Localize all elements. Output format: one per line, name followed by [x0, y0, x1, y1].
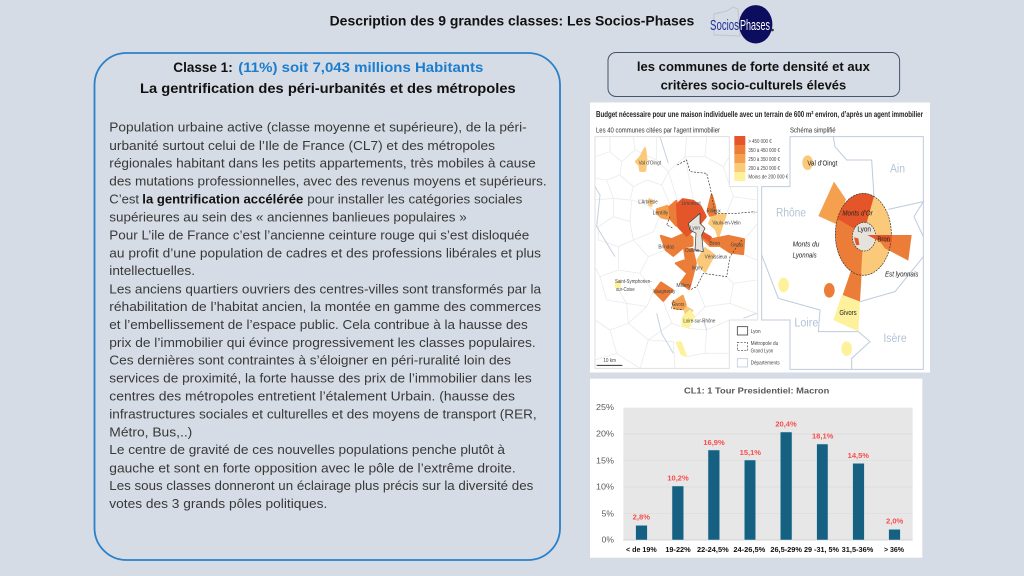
bar value labels: 2,0%: [886, 517, 904, 526]
y axis labels: 5%: [602, 508, 614, 518]
text block: body description: C’est: [109, 192, 139, 207]
bar value labels: 15,1%: [740, 448, 761, 457]
text block: body description: prix de l’immobilier qui évince progressivement les classes populaires.: [109, 335, 536, 350]
x axis labels: [626, 545, 904, 554]
commune labels: Loire-sur-Rhône: [683, 319, 715, 325]
schema labels: [776, 161, 919, 345]
x axis labels: < de 19%: [626, 545, 657, 554]
heading: la gentrification: La gentrification des péri-urbanités et des métropoles: [140, 80, 516, 96]
text block: body description: Population urbaine active (classe moyenne et supérieure), de la péri-: [109, 120, 527, 135]
x axis labels: 26,5-29%: [770, 545, 802, 554]
map: schéma simplifié: [762, 127, 923, 369]
commune labels: Irigny: [692, 265, 703, 271]
chart title: CL1: 1 Tour Presidentiel: Macron: [684, 386, 829, 396]
panel: budget map: [590, 102, 930, 372]
text block: body description: régionales habitant dans les petits appartements, très mobiles à cause: [109, 156, 536, 171]
scale bar: [597, 358, 622, 365]
text block: body description: infrastructures sociales et culturelles et des moyens de transport (RER,: [109, 406, 537, 421]
x axis labels: 22-24,5%: [697, 545, 729, 554]
commune labels: Vénissieux: [705, 255, 728, 261]
commune labels: Givors: [672, 302, 685, 308]
bar value labels: 2,8%: [633, 512, 650, 521]
text block: body description: services de proximité, la forte hausse des prix de l’immobilier dans les: [109, 370, 532, 385]
panel: communes heading: critères socio-culturels élevés: [661, 78, 846, 92]
bar value labels: [633, 420, 904, 526]
schema labels: Lyonnais: [793, 252, 817, 259]
legend: map symbols: Départements: [751, 360, 780, 366]
heading: classe 1: (11%) soit 7,043 millions Habitants: [238, 59, 484, 75]
legend: budget: 200 à 250 000 €: [748, 166, 780, 172]
commune labels: Vaulx-en-Velin: [712, 220, 741, 226]
text block: body description: au profit d’une population de cadres et des professions libérales et plus: [109, 245, 542, 260]
icon: Socios Phases logo: Socios: [710, 17, 739, 34]
legend: map symbols: [737, 327, 780, 367]
text block: body description: réhabilitation de l’habitat ancien, la montée en gamme des commerces: [109, 299, 542, 314]
commune labels: Saint-Symphorien-: [615, 279, 652, 285]
commune labels: Lyon: [690, 225, 700, 231]
commune labels: L’Arbresle: [638, 200, 658, 206]
legend: map symbols: Grand Lyon: [751, 348, 773, 354]
title: Description des 9 grandes classes: Les Socios-Phases: [330, 13, 695, 29]
bar value labels: 20,4%: [775, 420, 797, 429]
schema labels: Monts du: [793, 241, 819, 248]
map: 40 communes: Les 40 communes citées par l’agent immobilier: [596, 127, 721, 134]
text block: body description: centres des métropoles entretient l’étalement Urbain. (hausse des: [109, 388, 516, 403]
bars: [636, 432, 900, 540]
text block: body description: des mutations professionnelles, avec des revenus moyens et supérieurs.: [109, 174, 547, 189]
commune labels: Genas: [731, 243, 744, 249]
commune labels: Oullins: [685, 248, 700, 254]
x axis labels: 31,5-36%: [842, 545, 874, 554]
legend: budget: > 450 000 €: [748, 139, 772, 145]
panel: communes heading: les communes de forte densité et aux: [637, 59, 871, 74]
y axis labels: 25%: [596, 402, 614, 412]
bar chart: CL1 1 Tour Presidentiel Macron: [590, 379, 922, 558]
y axis labels: 0%: [602, 535, 614, 545]
schema labels: Isère: [883, 331, 907, 345]
region: communes colored by budget: [616, 148, 744, 356]
commune labels: Brindas: [658, 245, 675, 251]
bar value labels: 18,1%: [812, 432, 834, 441]
y axis labels: 20%: [596, 429, 614, 439]
x axis labels: > 36%: [884, 545, 904, 554]
icon: Socios Phases logo: Phases: [740, 17, 770, 34]
map: schéma simplifié: Schéma simplifié: [790, 127, 836, 134]
text block: body description: Le centre de gravité de ces nouvelles populations penche plutôt à: [109, 442, 506, 457]
y axis labels: [596, 402, 614, 545]
text block: body description: gauche et sont en forte opposition avec le pôle de l’extrême droite.: [109, 460, 516, 475]
schema labels: Val d’Oingt: [807, 161, 837, 168]
region: schema wedges: [778, 155, 912, 356]
text block: body description: [109, 120, 547, 511]
schema labels: Est lyonnais: [885, 271, 919, 278]
y axis labels: 10%: [596, 482, 614, 492]
text block: body description: et l’embellissement de l’espace public. Cela contribue à la hausse des: [109, 317, 528, 332]
text block: body description: Métro, Bus,..): [109, 424, 192, 439]
region: métropole boundary: [667, 160, 755, 310]
x axis labels: 24-26,5%: [733, 545, 766, 554]
legend: budget: 350 à 450 000 €: [748, 148, 780, 154]
legend: budget: Moins de 200 000 €: [748, 174, 788, 180]
text block: body description: Pour L’ile de France c’est l’ancienne ceinture rouge qui s’est disloquée: [109, 227, 529, 242]
schema labels: Rhône: [776, 205, 806, 219]
panel: communes heading: [608, 52, 900, 96]
text block: body description: supérieures au sein des « anciennes banlieues populaires »: [109, 210, 467, 225]
commune labels: Val d’Oingt: [639, 160, 661, 166]
schema labels: Loire: [794, 315, 819, 329]
icon: Socios Phases logo: [710, 5, 774, 44]
text block: body description: pour installer les catégories sociales: [307, 192, 523, 207]
legend: map symbols: Lyon: [751, 329, 761, 335]
heading: classe 1: Classe 1:: [173, 59, 233, 75]
commune labels: Limonest: [682, 201, 701, 207]
schema labels: Monts d’Or: [842, 211, 873, 218]
schema labels: Bron: [877, 236, 890, 243]
commune labels: Millery: [676, 283, 691, 289]
text block: body description: urbanité surtout celui de l’Ile de France (CL7) et des métropoles: [109, 138, 496, 153]
text block: body description: Les sous classes donneront un éclairage plus précis sur la diversité des: [109, 478, 534, 493]
x axis labels: 19-22%: [665, 545, 691, 554]
commune labels: Rillieux: [707, 208, 721, 214]
region: department borders: [595, 137, 758, 353]
commune labels: Lentilly: [653, 210, 669, 216]
text block: body description: intellectuelles.: [109, 263, 195, 278]
commune labels: Bron: [709, 241, 720, 247]
bar value labels: 10,2%: [667, 473, 689, 482]
schema labels: Lyon: [857, 227, 871, 234]
x axis labels: 29 -31, 5%: [804, 545, 839, 554]
schema labels: Ain: [890, 162, 905, 176]
y axis labels: 15%: [596, 455, 614, 465]
scale bar: 10 km: [603, 358, 616, 364]
text block: body description: Ces dernières sont contraintes à s’éloigner en péri-ruralité loin des: [109, 352, 512, 367]
legend: budget: 250 à 350 000 €: [748, 157, 780, 163]
text block: body description: Les anciens quartiers ouvriers des centres-villes sont transformés par la: [109, 281, 542, 296]
bar value labels: 14,5%: [848, 451, 869, 460]
legend: budget: [734, 136, 788, 181]
map: 40 communes: [595, 127, 758, 368]
legend: map symbols: Métropole du: [751, 341, 778, 347]
commune labels: Vaugneray: [653, 289, 676, 295]
commune labels: [615, 160, 744, 325]
commune labels: sur-Coise: [616, 287, 635, 293]
text block: body description: la gentrification accélérée: [142, 192, 303, 207]
bar value labels: 16,9%: [703, 438, 725, 447]
text block: body description: votes des 3 grands pôles politiques.: [109, 496, 327, 511]
panel: classe 1 description: [94, 53, 560, 560]
schema labels: Givors: [839, 310, 857, 317]
